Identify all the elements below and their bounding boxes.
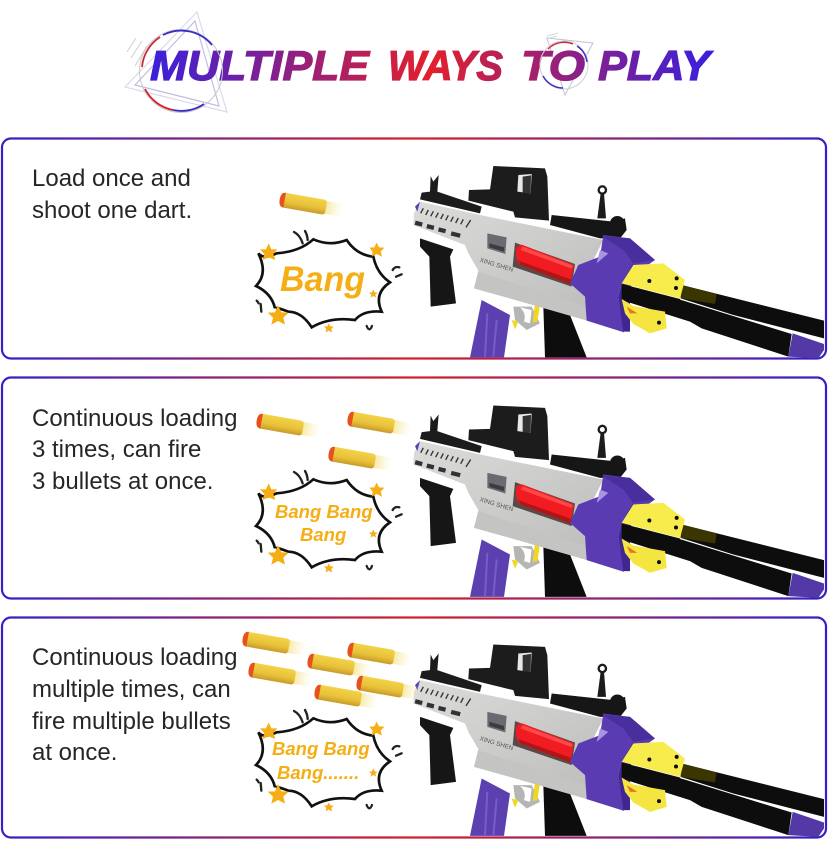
title text: TO bbox=[521, 42, 585, 89]
gun illustration bbox=[413, 644, 824, 837]
panel border bbox=[2, 618, 826, 838]
description text: fire multiple bullets bbox=[32, 708, 231, 735]
bang burst: Bang Bang bbox=[272, 738, 370, 759]
bang burst bbox=[256, 471, 402, 572]
panel border bbox=[2, 378, 826, 598]
panel: load once bbox=[2, 138, 826, 358]
description text: 3 times, can fire bbox=[32, 436, 201, 463]
bang burst bbox=[256, 710, 402, 811]
gun illustration bbox=[413, 166, 824, 358]
gun illustration bbox=[413, 405, 824, 598]
title bbox=[125, 12, 714, 112]
flying darts bbox=[241, 631, 421, 710]
title decoration: small ring bbox=[540, 41, 588, 89]
bang burst: Bang Bang bbox=[275, 501, 373, 522]
panel border bbox=[2, 138, 826, 358]
description text: 3 bullets at once. bbox=[32, 468, 213, 495]
title text: WAYS bbox=[388, 42, 503, 89]
description text: shoot one dart. bbox=[32, 197, 192, 224]
bang burst bbox=[256, 231, 402, 332]
title text: PLAY bbox=[598, 42, 714, 89]
title decoration: large ring bbox=[140, 30, 222, 112]
description text: multiple times, can bbox=[32, 676, 231, 703]
description text: Continuous loading bbox=[32, 405, 238, 432]
bang burst: Bang....... bbox=[277, 762, 359, 783]
flying darts bbox=[255, 411, 412, 472]
description text: Load once and bbox=[32, 165, 191, 192]
description text: at once. bbox=[32, 739, 117, 766]
flying dart bbox=[278, 192, 344, 218]
description text: Continuous loading bbox=[32, 644, 238, 671]
title text bbox=[150, 42, 714, 89]
bang burst: Bang bbox=[300, 524, 346, 545]
panel: multiple darts bbox=[2, 618, 826, 838]
title decoration: triangles and speed lines bbox=[125, 12, 593, 112]
bang burst: Bang bbox=[280, 260, 365, 299]
title text: MULTIPLE bbox=[150, 42, 371, 89]
panel: three darts bbox=[2, 378, 826, 598]
